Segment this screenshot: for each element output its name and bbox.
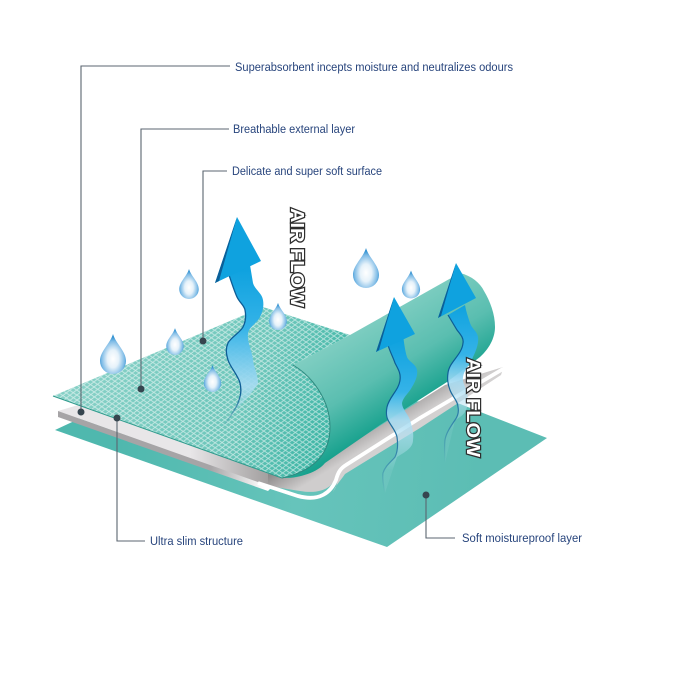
drop: beside arrow [269, 303, 287, 330]
leader line: moistureproof layer [422, 492, 455, 538]
drop: on sheet left [166, 328, 184, 355]
drop: large left [100, 334, 126, 374]
drop: on sheet centre [204, 365, 221, 392]
label: soft surface: Delicate and super soft surface [232, 164, 382, 178]
drop: small right [402, 270, 420, 298]
air flow label upper: AIR FLOW [287, 208, 307, 307]
leader line: superabsorbent [78, 66, 230, 416]
sheet front edge [53, 396, 282, 478]
leader line: ultra slim [114, 414, 145, 541]
drop: upper left [179, 269, 199, 299]
label: moistureproof: Soft moistureproof layer [462, 531, 582, 545]
label: superabsorbent: Superabsorbent incepts moisture and neutralizes odours [235, 60, 513, 74]
middle layer [58, 367, 503, 498]
drop: large right [353, 248, 379, 288]
bottom moistureproof layer [55, 400, 547, 547]
roll inner arc [282, 365, 330, 478]
leader line: soft surface [200, 171, 227, 344]
arrow: air flow middle [376, 297, 417, 493]
label: ultra slim: Ultra slim structure [150, 534, 243, 548]
mesh top sheet [53, 307, 350, 478]
arrow: air flow left [215, 217, 263, 427]
leader line: breathable layer [138, 129, 229, 392]
air flow label lower: AIR FLOW [463, 358, 483, 457]
arrow: air flow right [438, 263, 478, 463]
roll of teal upper layer [285, 273, 495, 478]
label: breathable: Breathable external layer [233, 122, 355, 136]
